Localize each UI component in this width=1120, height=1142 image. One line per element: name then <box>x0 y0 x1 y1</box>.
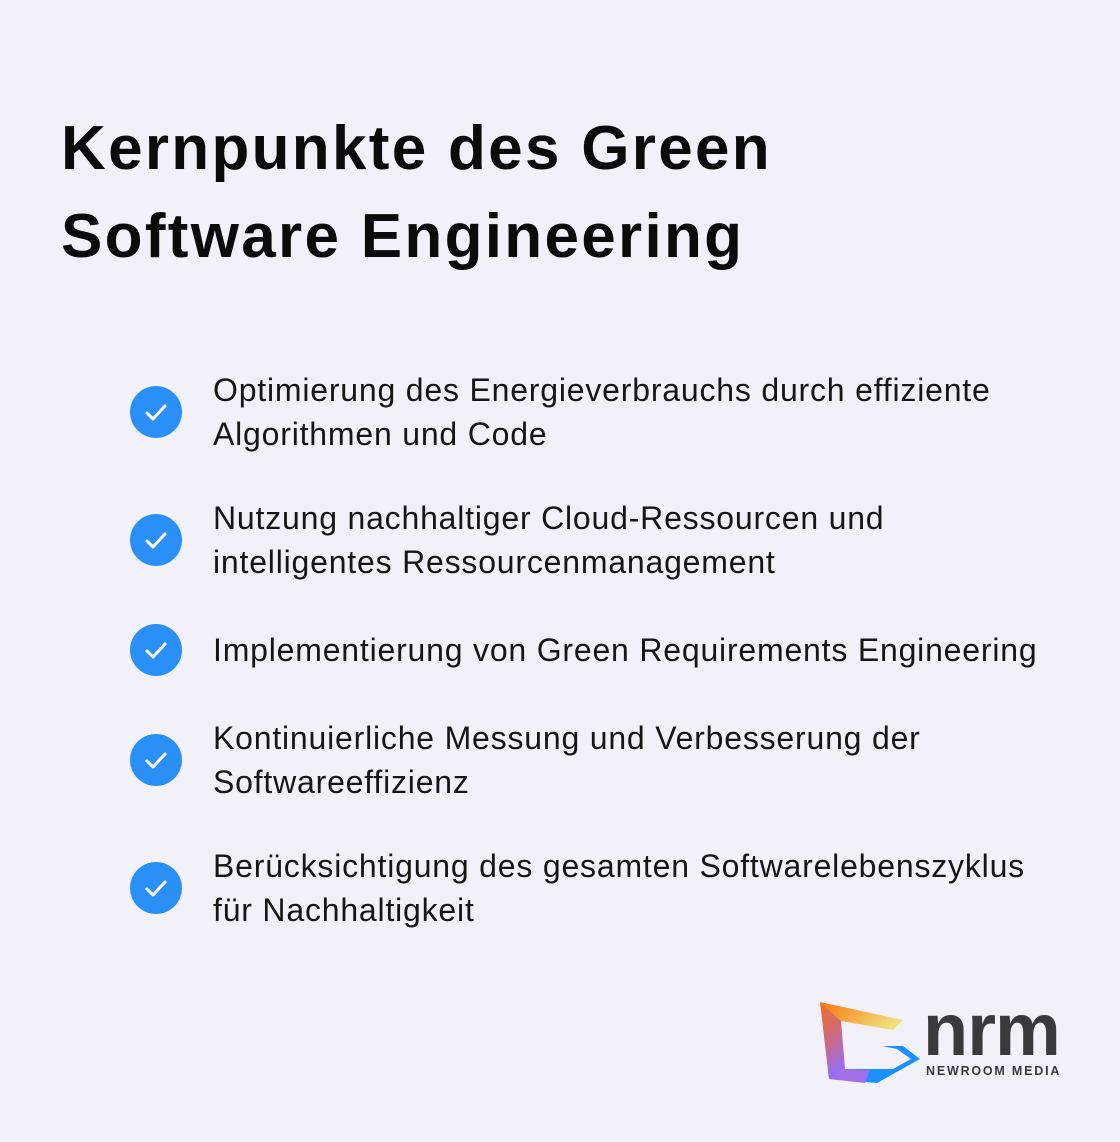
text <box>213 720 921 800</box>
text <box>213 500 884 580</box>
text <box>213 372 991 452</box>
text <box>213 848 1025 928</box>
title <box>61 114 772 271</box>
title: Kernpunkte des Green <box>61 114 772 183</box>
text: Kontinuierliche Messung und Verbesserung der <box>213 720 921 756</box>
text: Implementierung von Green Requirements Engineering <box>213 632 1037 668</box>
text: Berücksichtigung des gesamten Softwarelebenszyklus <box>213 848 1025 884</box>
item 2 <box>130 500 884 580</box>
text: Nutzung nachhaltiger Cloud-Ressourcen und <box>213 500 884 536</box>
item 4 <box>130 720 921 800</box>
item 3 <box>130 624 1037 676</box>
title: Software Engineering <box>61 202 744 271</box>
text: Softwareeffizienz <box>213 764 470 800</box>
logo: NEWROOM MEDIA <box>926 1064 1061 1078</box>
icon: check <box>130 734 182 786</box>
item 5 <box>130 848 1025 928</box>
logo <box>820 995 1061 1083</box>
logo mark <box>820 1002 920 1083</box>
text: Algorithmen und Code <box>213 416 547 452</box>
text: Optimierung des Energieverbrauchs durch effiziente <box>213 372 991 408</box>
text: intelligentes Ressourcenmanagement <box>213 544 776 580</box>
item 1 <box>130 372 991 452</box>
icon: check <box>130 386 182 438</box>
text: für Nachhaltigkeit <box>213 892 475 928</box>
icon: check <box>130 514 182 566</box>
icon: check <box>130 624 182 676</box>
icon: check <box>130 862 182 914</box>
